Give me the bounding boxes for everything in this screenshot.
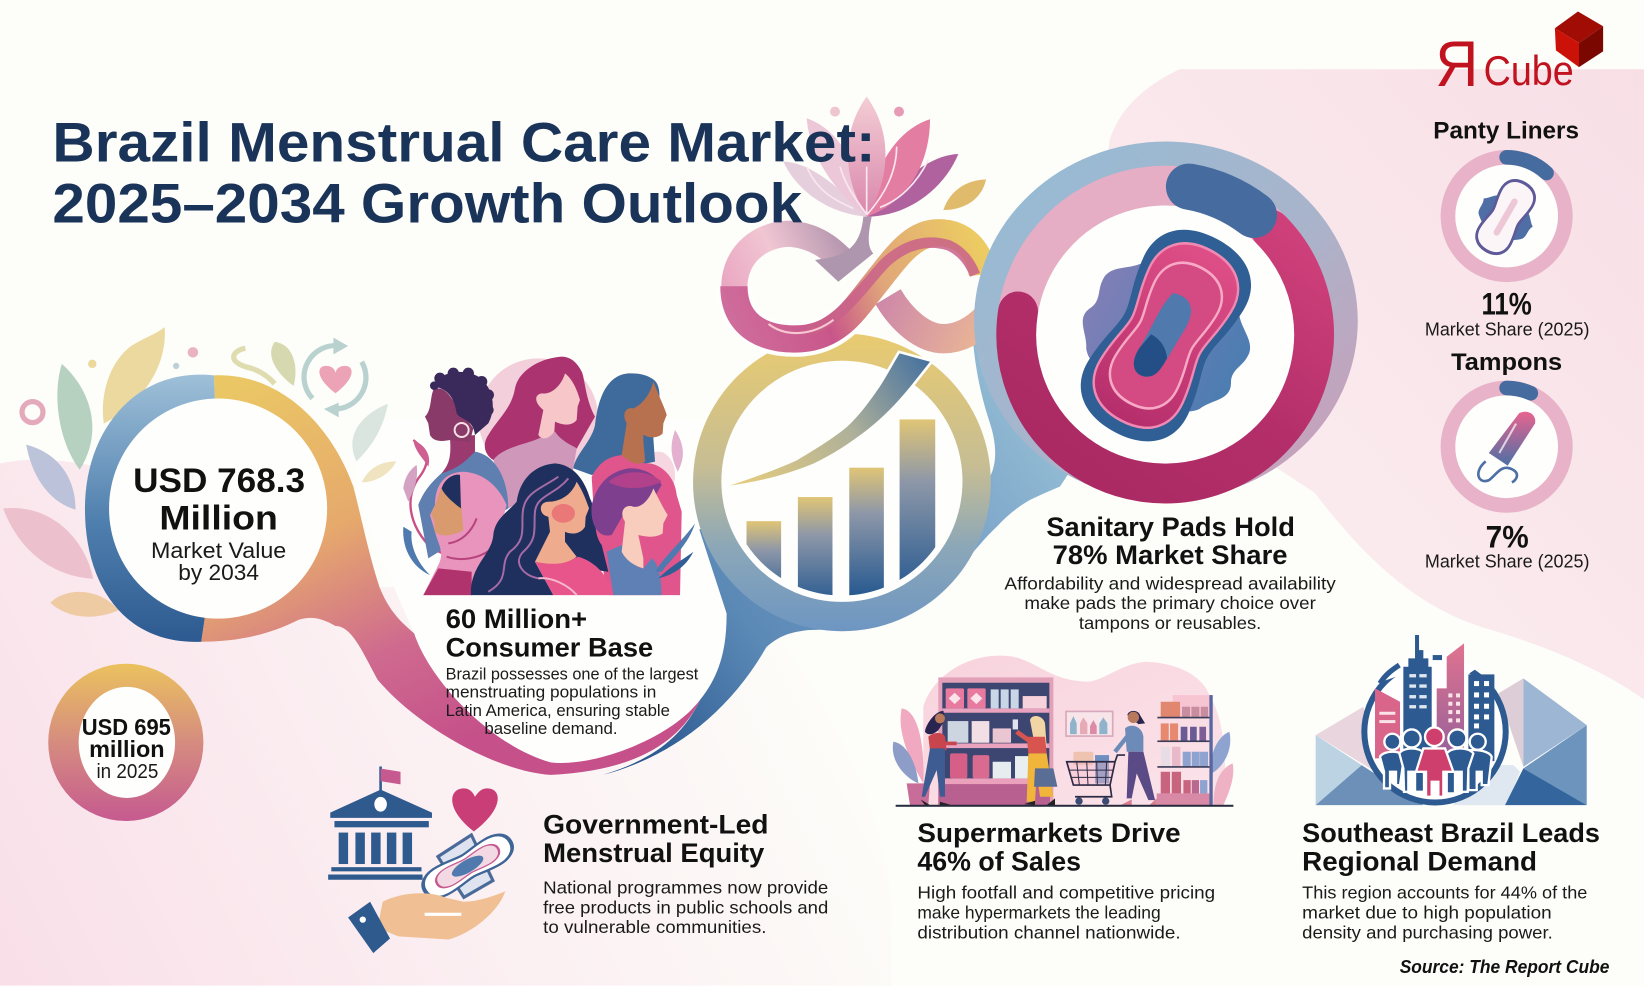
logo: RCube	[1435, 12, 1603, 100]
text: southeast Brazil: This region accounts for 44% of the	[1302, 883, 1587, 903]
text: sanitary pads share: 78% Market Share	[1053, 539, 1288, 570]
value ring: USD 695 million in 2025: USD 695	[82, 714, 171, 740]
blue ribbon connecting chart ring to big ring	[603, 315, 1090, 775]
woman: long blue hair	[573, 373, 682, 595]
text: sanitary pads share: Affordability and widespread availability	[1004, 573, 1336, 593]
text: consumer base: baseline demand.	[484, 719, 618, 738]
store shelf: left	[938, 677, 1053, 805]
store shelf: right	[1157, 695, 1213, 805]
panel: tampons share	[1425, 349, 1589, 571]
big ring: sanitary pads share	[974, 142, 1358, 500]
panel: panty liners share: 11%	[1481, 287, 1532, 322]
panel: tampons share: 7%	[1486, 519, 1529, 554]
logo: RCube: Cube	[1484, 47, 1574, 94]
text: supermarkets	[917, 817, 1215, 942]
floor line	[896, 805, 1233, 807]
text: southeast Brazil: Southeast Brazil Leads	[1302, 817, 1600, 848]
panel: tampons share: Tampons	[1451, 349, 1562, 376]
text: consumer base: Latin America, ensuring stable	[446, 701, 670, 720]
text: southeast Brazil: market due to high population	[1302, 903, 1552, 923]
text: consumer base: menstruating populations in	[446, 682, 656, 701]
chart ring with growth bars	[693, 333, 991, 631]
woman: dark wavy hair with blush	[471, 463, 613, 595]
bar chart	[747, 419, 935, 607]
text: sanitary pads share: Sanitary Pads Hold	[1046, 511, 1295, 542]
value ring: USD 695 million in 2025: million	[89, 736, 165, 762]
icon: pad in hand	[412, 820, 523, 913]
illustration: group of diverse women	[403, 357, 695, 595]
decorative leaves around value ring	[3, 327, 396, 617]
text: supermarkets: distribution channel nationwide.	[917, 922, 1181, 942]
people group	[1380, 727, 1492, 797]
text: supermarkets: High footfall and competitive pricing	[917, 883, 1215, 903]
value ring: USD 695 million in 2025	[48, 664, 203, 821]
woman: short curly hair	[418, 368, 508, 558]
woman: long magenta hair	[485, 357, 595, 508]
icon: heart	[452, 788, 498, 832]
illustration: supermarket scene	[893, 656, 1233, 807]
logo: RCube: Я	[1435, 27, 1478, 100]
illustration: Southeast Brazil city and population	[1316, 635, 1587, 805]
text: government-led menstrual equity: to vulnerable communities.	[543, 917, 766, 937]
woman: pink hijab	[423, 472, 507, 595]
shopper: woman with cart	[1115, 711, 1157, 805]
text: southeast Brazil: Regional Demand	[1302, 845, 1537, 876]
text: sanitary pads share: make pads the primary choice over	[1024, 593, 1316, 613]
text: southeast Brazil	[1302, 817, 1600, 942]
infinity ribbon	[734, 233, 988, 339]
panel: tampons share: Market Share (2025)	[1425, 550, 1589, 571]
woman: purple hair	[591, 468, 668, 595]
text: consumer base: Brazil possesses one of the largest	[446, 664, 699, 683]
title: Brazil Menstrual Care Market:	[52, 111, 875, 173]
title: 2025–2034 Growth Outlook	[52, 172, 802, 234]
value text: Million	[159, 500, 278, 538]
text: government-led menstrual equity: National programmes now provide	[543, 877, 828, 897]
panel: panty liners share	[1425, 117, 1589, 340]
text: consumer base	[446, 603, 699, 738]
picture frame with bottles	[1066, 711, 1113, 736]
flowing ribbon from value ring	[201, 375, 700, 775]
donut: tampons	[1448, 388, 1565, 505]
skyline	[1375, 635, 1494, 761]
panel: panty liners share: Market Share (2025)	[1425, 319, 1589, 340]
value text: Market Value	[151, 538, 286, 563]
value text: by 2034	[178, 560, 259, 585]
growth arrow swoosh	[730, 353, 930, 485]
title	[52, 111, 875, 234]
text: government-led menstrual equity	[543, 809, 828, 937]
text: consumer base: 60 Million+	[446, 603, 587, 634]
text: sanitary pads share: tampons or reusables.	[1079, 613, 1261, 633]
shopping cart	[1067, 752, 1125, 805]
text: supermarkets: Supermarkets Drive	[917, 817, 1181, 848]
icon: government building, heart, pad and hand	[328, 767, 523, 953]
text: supermarkets: make hypermarkets the leading	[917, 903, 1161, 923]
icon: sanitary pad	[1042, 201, 1290, 470]
icon: panty liner	[1462, 169, 1549, 265]
lotus flower	[783, 97, 986, 282]
text: government-led menstrual equity: Menstrual Equity	[543, 837, 765, 868]
value text	[133, 462, 305, 585]
text: government-led menstrual equity: free products in public schools and	[543, 897, 828, 917]
text: supermarkets: 46% of Sales	[917, 845, 1081, 876]
text: consumer base: Consumer Base	[446, 631, 653, 662]
text: southeast Brazil: density and purchasing power.	[1302, 922, 1553, 942]
value text: USD 768.3	[133, 462, 305, 500]
donut: panty liners	[1448, 157, 1565, 275]
value ring: USD 695 million in 2025: in 2025	[96, 761, 158, 783]
value ring: USD 768.3 Million	[85, 375, 700, 775]
panel: panty liners share: Panty Liners	[1433, 117, 1579, 144]
text: sanitary pads share	[1004, 511, 1336, 633]
text: government-led menstrual equity: Government-Led	[543, 809, 769, 840]
shopper: woman at shelf	[921, 711, 957, 805]
icon: tampon	[1478, 412, 1535, 482]
source note: Source: The Report Cube	[1400, 956, 1609, 977]
shopper: woman with shopping bag	[1013, 716, 1057, 805]
